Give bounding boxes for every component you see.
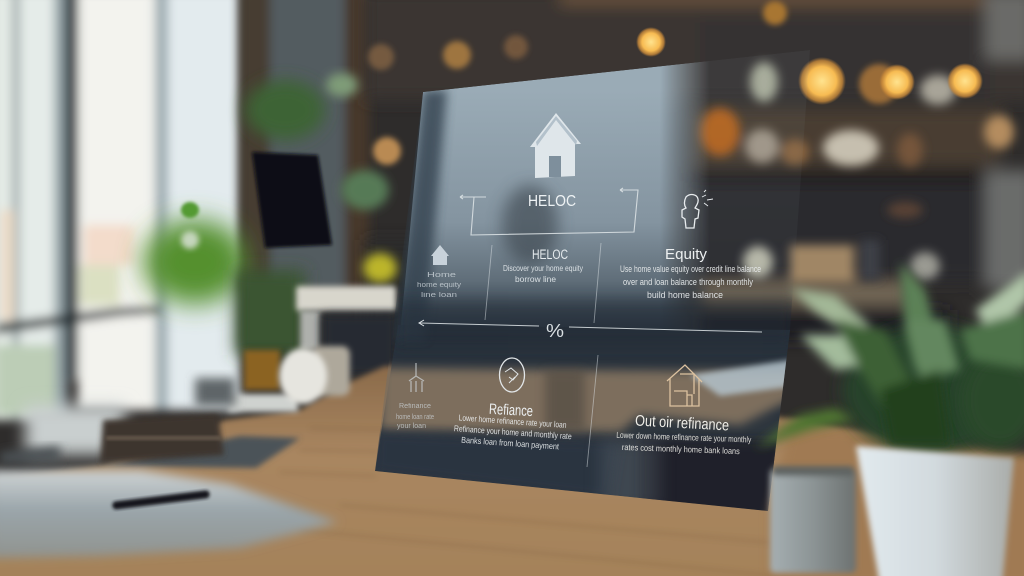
column: Out our refinance [616,413,752,456]
background: window [0,0,240,420]
column: Equity [620,246,761,300]
column: Out our refinance: Lower down home refinance rate your monthly [616,430,752,444]
text: lower left column: your loan [397,423,426,430]
column: Equity: build home balance [647,290,723,300]
column: small home [417,245,462,299]
column: Refinance: Refiance [489,401,533,420]
column: Refinance [453,401,573,452]
vertical dividers [485,243,601,467]
foreground: white pot [856,446,1014,576]
background: interior wall [240,0,369,290]
background: shelf objects [700,62,1014,283]
panel: lower glass [375,325,795,511]
background: blurred plants and monitor [143,73,397,390]
icon: small house [431,245,449,265]
foreground: table right edge [770,425,1024,576]
foreground: grey cup [770,466,856,573]
background: desk items [0,346,350,558]
foreground: plant [755,262,1024,455]
axis with percent symbol [419,320,762,341]
text: lower left column [396,403,434,430]
diagram bracket [460,188,638,235]
column: small home: home equity [417,282,462,289]
panel: glass reflections [374,90,805,520]
column: small home: Home [427,272,456,279]
panel: upper glass [400,50,810,335]
background: wooden table [0,366,1024,576]
column: HELOC: Discover your home equity [503,263,584,273]
column: Equity: Equity [665,246,707,263]
column: small home: line loan [421,292,457,299]
axis with percent symbol: % [546,321,564,341]
background: shelves [365,0,1024,340]
text: lower left column: Refinance [399,403,431,410]
column: Refinance: Lower home refinance rate your loan [458,412,567,430]
icon: large house [530,113,581,178]
panel: glass infographic [374,50,810,520]
icon: small house lower left [409,363,424,392]
background: bokeh lights [368,1,983,165]
icon: refinance circle [500,358,524,392]
icon: house outline [667,365,702,406]
column: Out our refinance: rates cost monthly home bank loans [622,442,740,456]
column: Out our refinance: Out oir refinance [635,413,729,434]
column: HELOC: HELOC [532,247,568,262]
column: Equity: Use home value equity over credit line balance [620,264,761,274]
heading: HELOC: HELOC [528,193,576,210]
text: lower left column: home loan rate [396,414,434,421]
column: HELOC [503,247,584,284]
column: Equity: over and loan balance through monthly [623,277,753,287]
column: Refinance: Banks loan from loan payment [461,435,560,451]
column: Refinance: Refinance your home and monthly rate [454,423,572,441]
icon: equity figure [682,190,713,228]
column: HELOC: borrow line [515,274,556,284]
